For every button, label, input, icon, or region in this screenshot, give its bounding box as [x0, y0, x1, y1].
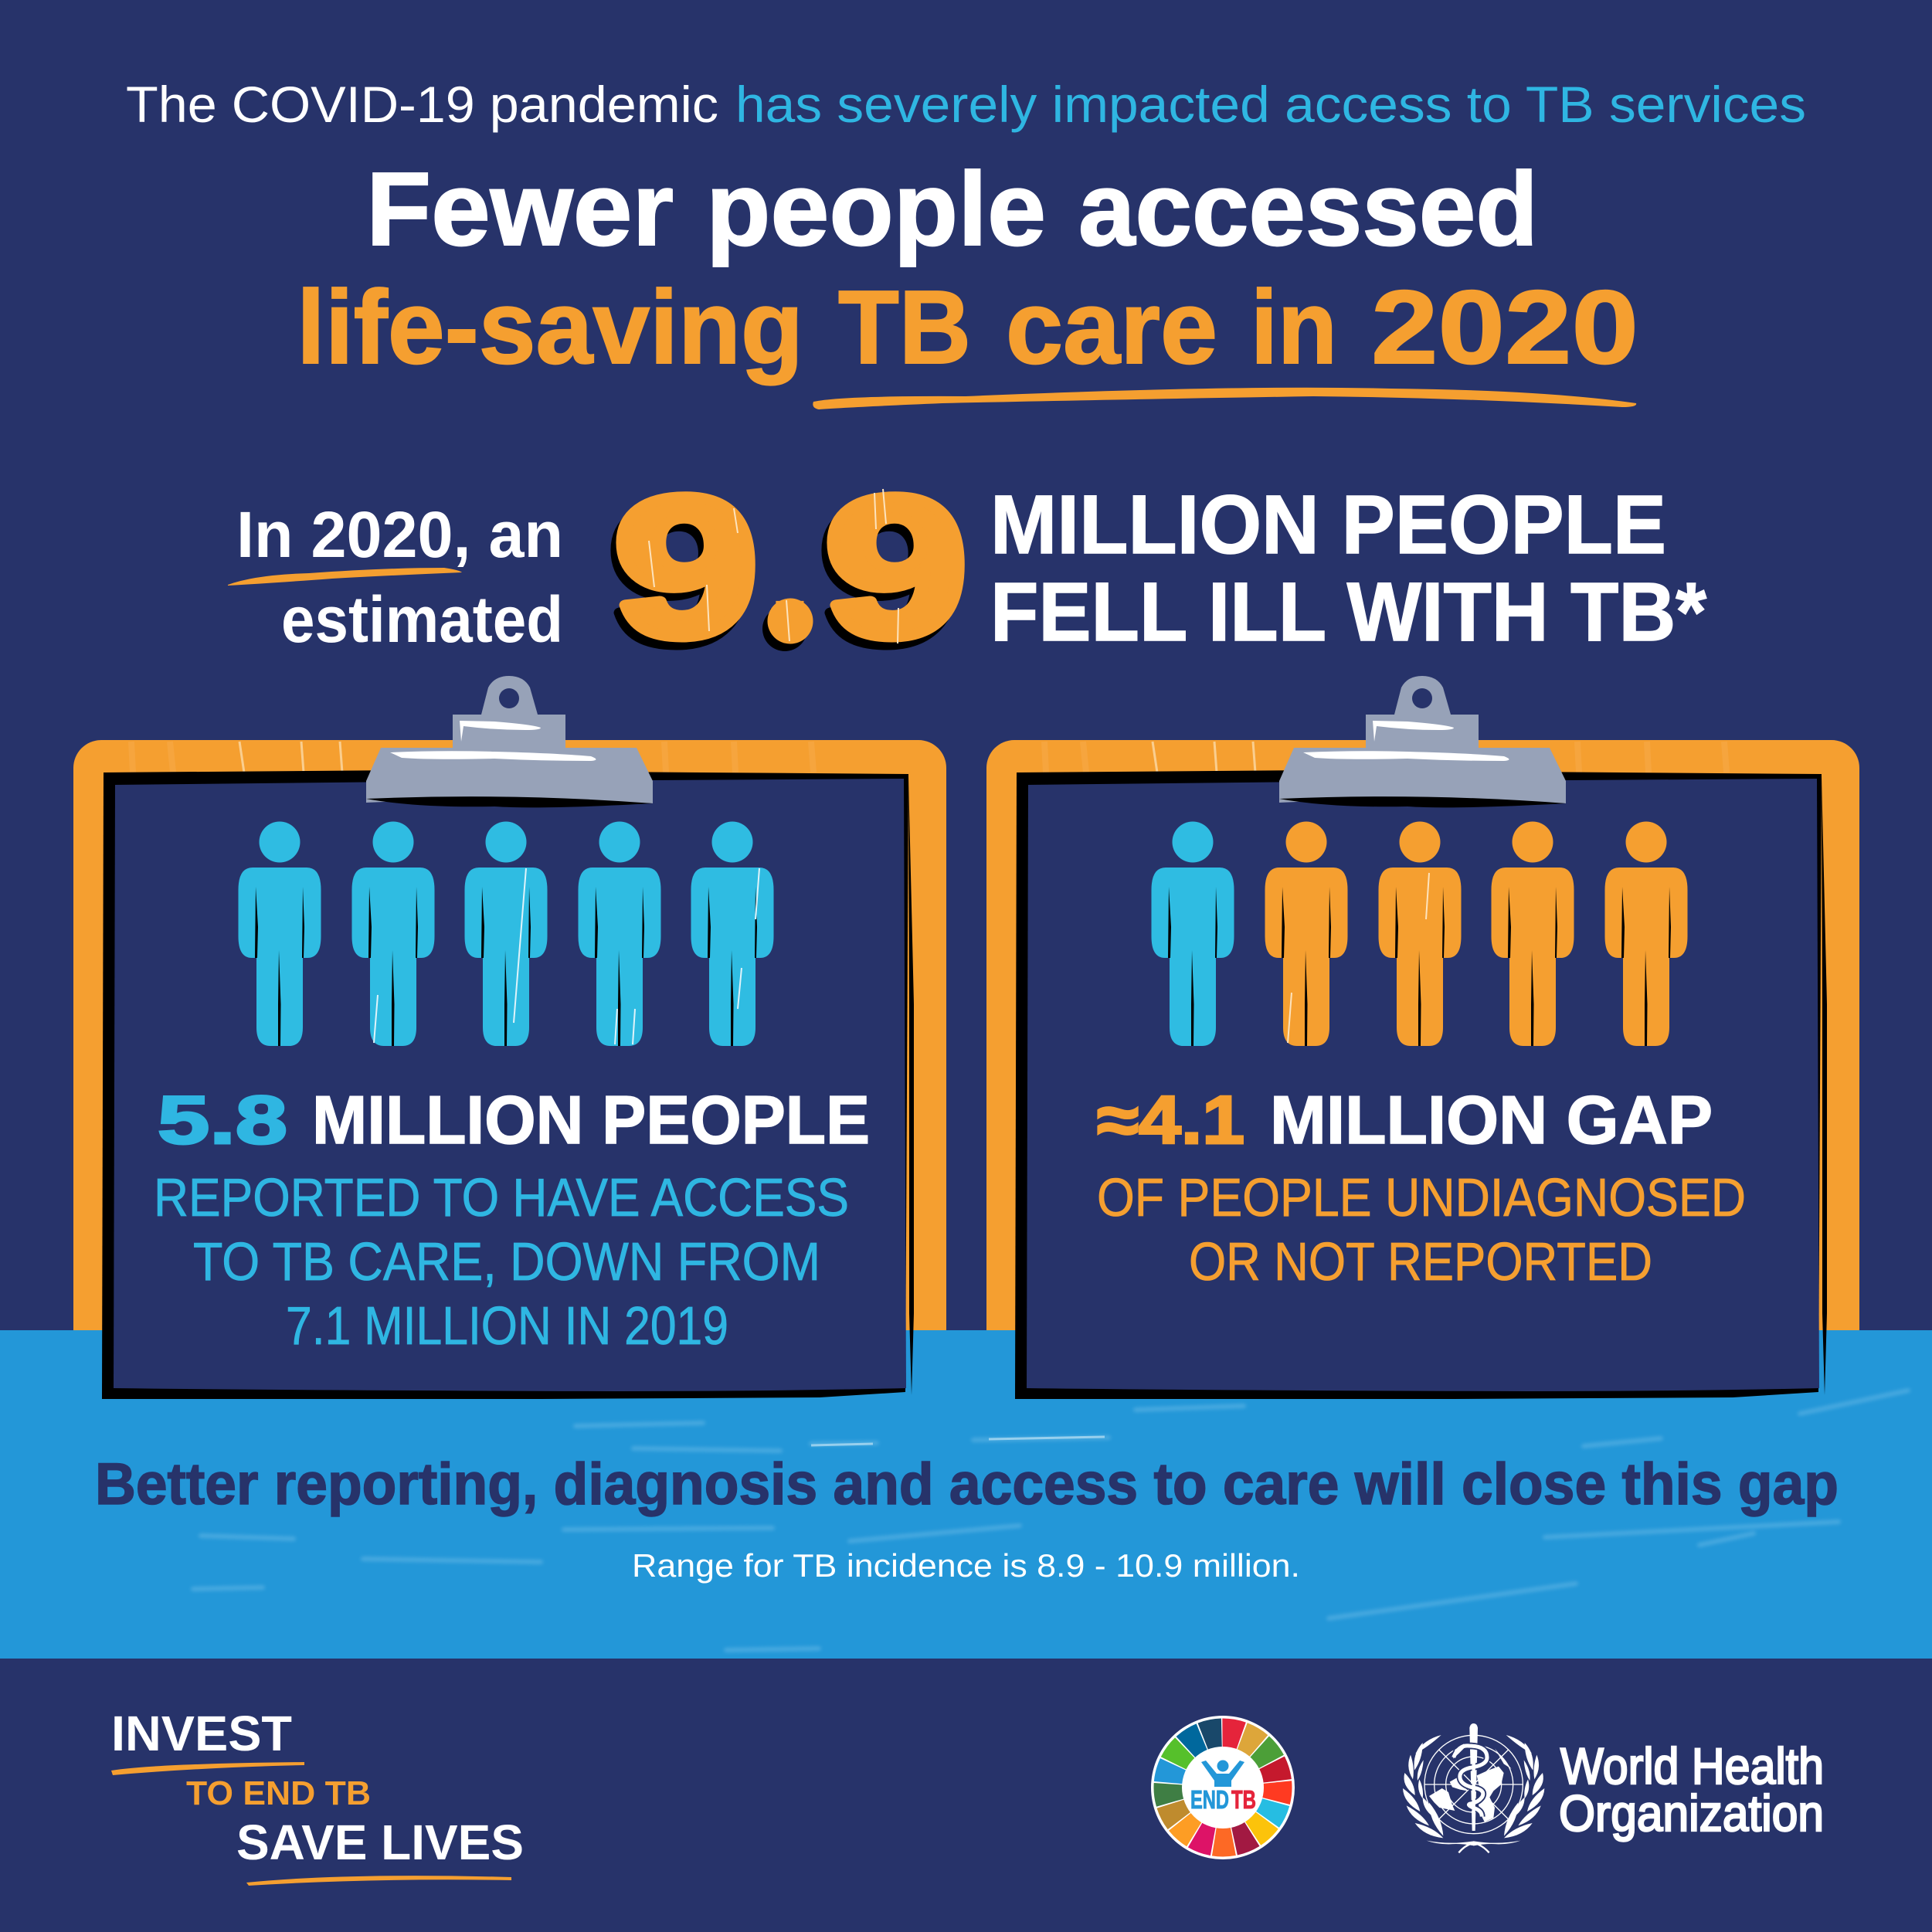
description: reported access: 7.1 MILLION IN 2019	[286, 1295, 728, 1356]
heading: million people fell ill: MILLION PEOPLE	[990, 477, 1666, 571]
slogan: invest to end TB save lives: SAVE LIVES	[236, 1815, 524, 1870]
description: reported access: TO TB CARE, DOWN FROM	[193, 1231, 820, 1292]
title: Fewer	[366, 151, 674, 267]
description: reported access	[154, 1167, 849, 1356]
title: life-saving	[297, 269, 803, 385]
logo: End TB wheel: END	[1190, 1785, 1229, 1814]
big number 9.9: 9	[609, 464, 752, 685]
stat: 5.8 million people: MILLION PEOPLE	[312, 1081, 870, 1158]
clipboard frames: orange	[73, 740, 1859, 1358]
description: undiagnosed: OR NOT REPORTED	[1189, 1231, 1652, 1292]
slogan: invest to end TB save lives: INVEST	[111, 1706, 292, 1761]
subtitle: COVID-19 impact	[126, 76, 1806, 133]
title: in	[1251, 269, 1337, 385]
slogan: invest to end TB save lives	[111, 1706, 524, 1886]
stat: 5.8 million people: 5.8	[158, 1081, 287, 1158]
icon row: one blue, four orange people	[1151, 822, 1687, 1046]
description: undiagnosed: OF PEOPLE UNDIAGNOSED	[1097, 1167, 1746, 1227]
stat: 4.1 million gap: ≈4.1	[1097, 1081, 1244, 1158]
title: people	[706, 151, 1046, 267]
intro underline	[228, 568, 462, 586]
big number 9.9: 9	[614, 457, 758, 677]
title: accessed	[1078, 151, 1538, 267]
heading: million people fell ill: FELL ILL WITH TB*	[990, 565, 1706, 658]
stat: 4.1 million gap: MILLION GAP	[1270, 1081, 1713, 1158]
subtitle: COVID-19 impact: has severely impacted access to TB services	[735, 76, 1806, 133]
panel: right clipboard board	[1015, 770, 1827, 1399]
description: undiagnosed	[1097, 1167, 1746, 1292]
big number 9.9	[609, 452, 967, 685]
title: 2020	[1371, 269, 1638, 385]
title: TB	[838, 269, 971, 385]
big number 9.9: 9	[820, 464, 962, 685]
logo text: World Health Organization: World Health	[1560, 1737, 1824, 1794]
intro text: In 2020, an estimated: In 2020, an	[236, 498, 563, 571]
big number 9.9: 9	[825, 457, 967, 677]
title	[297, 151, 1638, 385]
message: close the gap: Better reporting, diagnosis and access to care will close this gap	[95, 1452, 1839, 1517]
icon: right clipboard clip	[1279, 676, 1566, 807]
intro text: In 2020, an estimated: estimated	[281, 583, 563, 656]
logo text: World Health Organization: Organization	[1559, 1784, 1824, 1842]
intro text: In 2020, an estimated	[236, 498, 563, 656]
right panel text	[1097, 1081, 1746, 1292]
title underline	[813, 388, 1636, 409]
heading: million people fell ill	[990, 477, 1706, 658]
big number 9.9: .	[762, 452, 817, 673]
logo: End TB wheel: TB	[1231, 1785, 1256, 1814]
blue band	[0, 1330, 1932, 1659]
logo text: World Health Organization	[1559, 1737, 1824, 1842]
logo: End TB wheel	[1146, 1710, 1300, 1865]
logo: World Health Organization emblem	[1403, 1723, 1544, 1852]
left panel text	[154, 1081, 870, 1356]
icon row: five blue people	[238, 822, 774, 1046]
title: care	[1006, 269, 1217, 385]
subtitle: COVID-19 impact: The COVID-19 pandemic	[126, 76, 718, 133]
description: reported access: REPORTED TO HAVE ACCESS	[154, 1167, 849, 1227]
icon: left clipboard clip	[366, 676, 653, 807]
panel: left clipboard board	[102, 770, 914, 1399]
footnote: range: Range for TB incidence is 8.9 - 10.9 million.	[632, 1547, 1300, 1584]
slogan: invest to end TB save lives: TO END TB	[186, 1774, 371, 1812]
big number 9.9: .	[757, 460, 812, 681]
